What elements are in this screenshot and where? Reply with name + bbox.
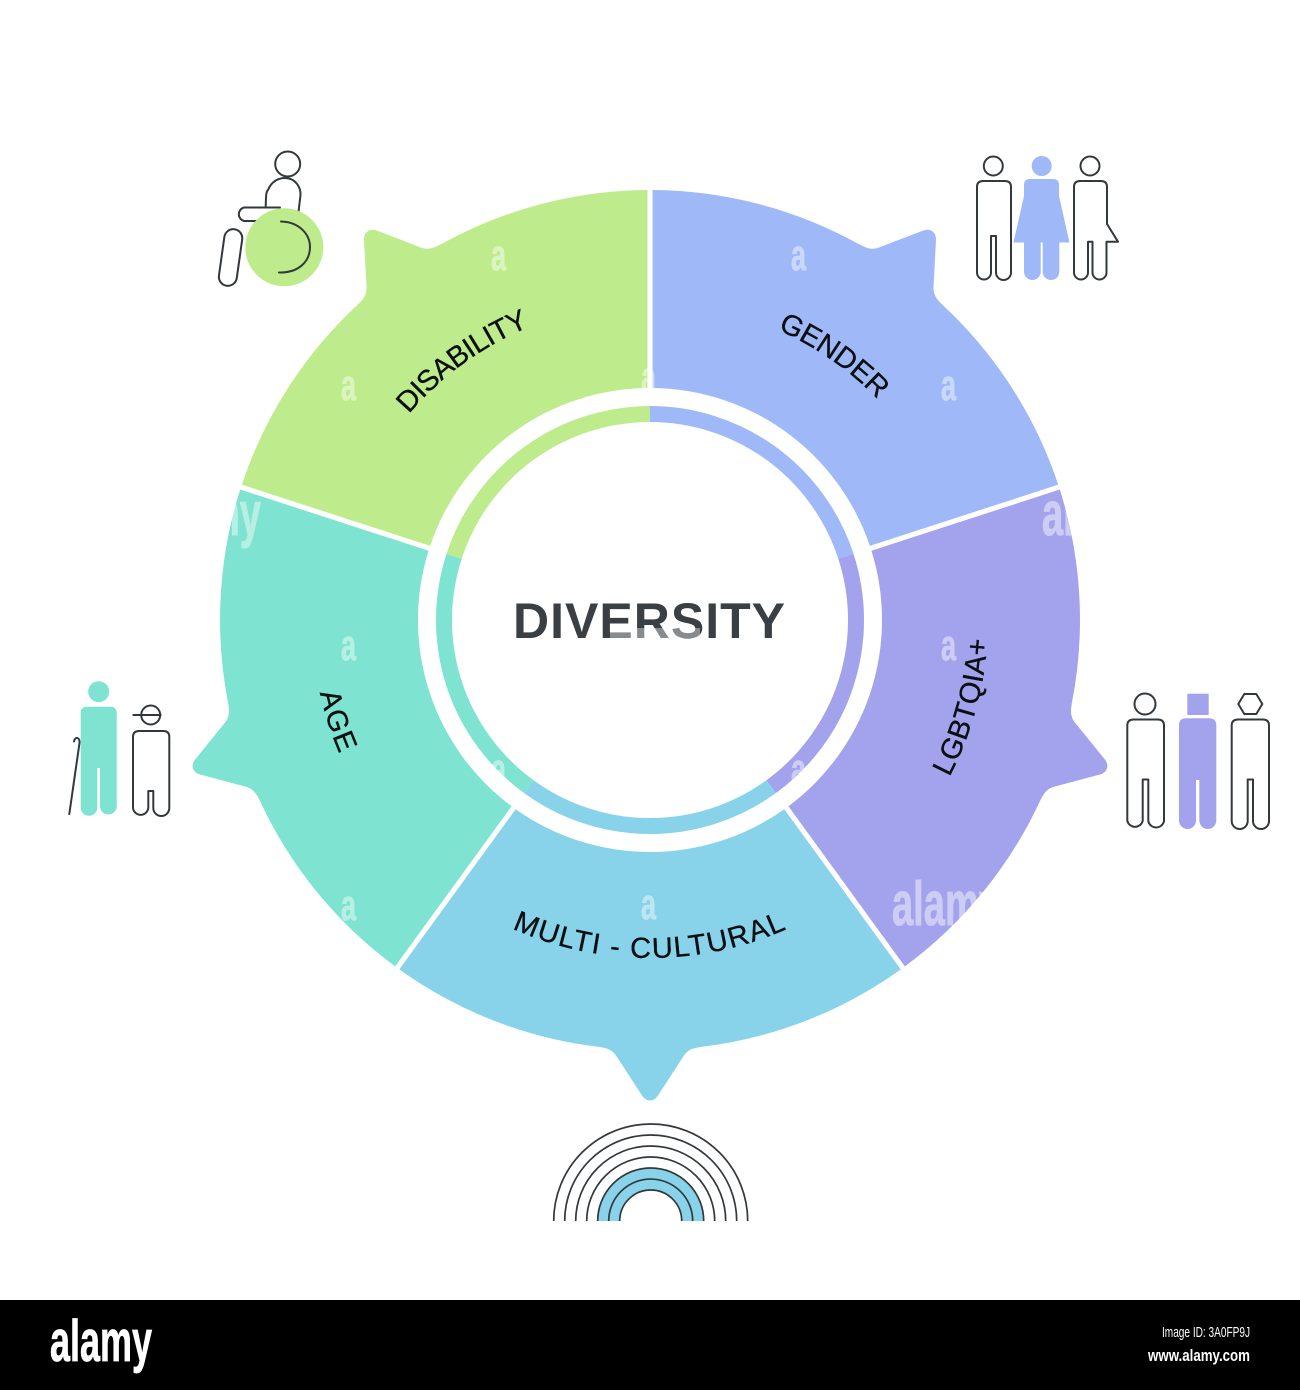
watermark marks: a (791, 231, 806, 280)
watermark marks (153, 231, 1150, 939)
watermark marks: a (341, 621, 356, 670)
segment: age (116, 440, 548, 1007)
watermark marks: a (941, 361, 956, 410)
watermark marks: a (641, 880, 656, 929)
watermark marks: a (491, 745, 506, 794)
label: multi-cultural: MULTI - CULTURAL (514, 910, 786, 958)
website: www.alamy.com (1147, 1346, 1250, 1365)
icon: rainbow (554, 1124, 748, 1221)
label: disability: DISABILITY (395, 308, 522, 412)
segment: disability (165, 84, 742, 614)
title: diversity: DIVERSITY (513, 593, 785, 649)
label: gender: GENDER (782, 314, 888, 399)
footer logo: alamy (50, 1309, 152, 1374)
segment: multi-cultural (399, 809, 901, 1100)
icon: older and younger people (69, 681, 169, 816)
segment: lgbtqia+ (752, 440, 1184, 1007)
label: age: AGE (320, 692, 358, 753)
icon: wheelchair user (218, 152, 323, 287)
watermark marks: a (791, 745, 806, 794)
watermark marks: a (341, 881, 356, 930)
watermark marks: alamy (892, 870, 1000, 939)
watermark marks: a (341, 361, 356, 410)
icon: lgbtqia people (1127, 694, 1269, 829)
watermark marks: a (941, 621, 956, 670)
label: lgbtqia+: LGBTQIA+ (932, 640, 986, 776)
icon: gender people (977, 156, 1118, 280)
image id: Image ID: 3A0FP9J (1162, 1324, 1250, 1341)
footer bar (0, 1300, 1300, 1390)
segment: gender (558, 84, 1135, 614)
watermark marks: a (491, 231, 506, 280)
inner colour ring (444, 414, 856, 826)
watermark marks: alamy (1042, 480, 1150, 549)
watermark marks: a (641, 353, 656, 402)
watermark marks: alamy (153, 480, 261, 549)
